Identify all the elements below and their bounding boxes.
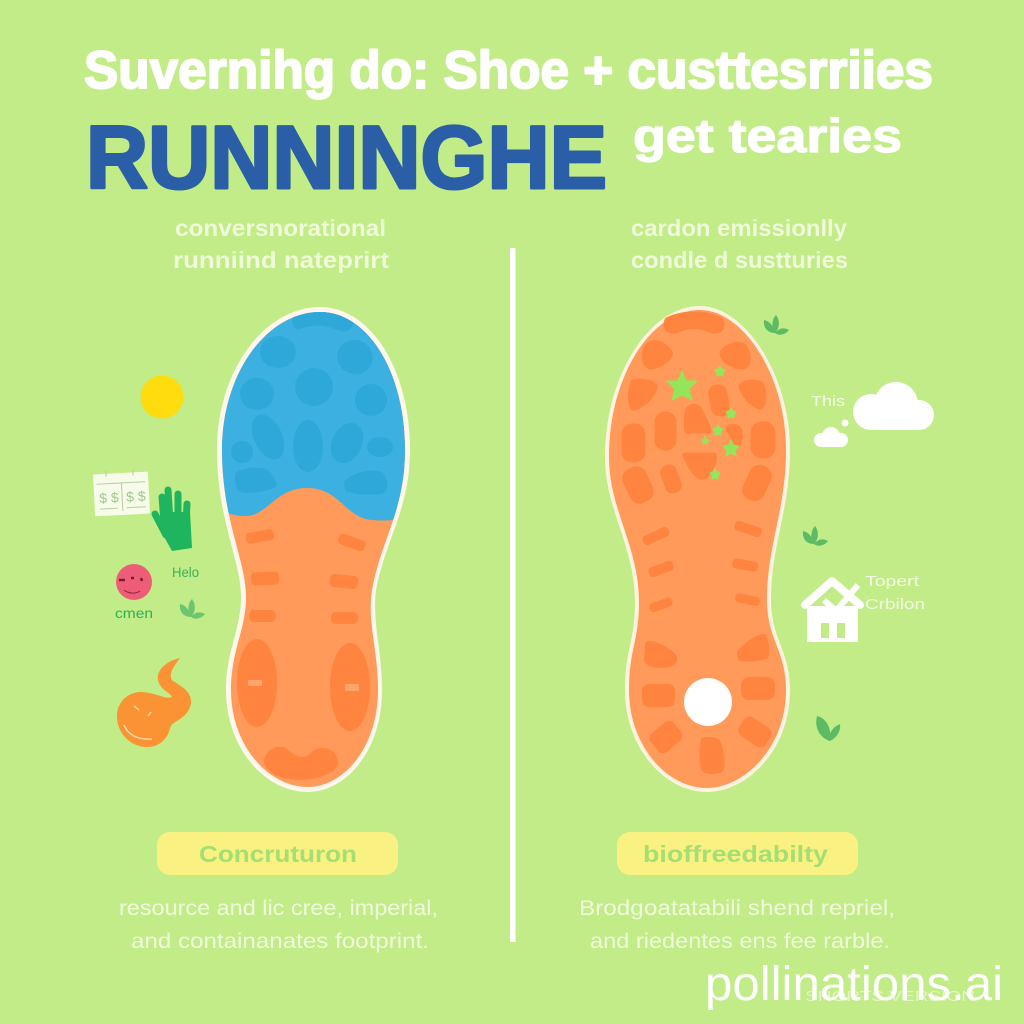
label: Helo: Helo	[172, 564, 199, 580]
label: This: This	[811, 393, 845, 410]
blue forefoot	[222, 312, 405, 520]
right description: Brodgoatatabili shend repriel,	[579, 897, 895, 920]
icon: big cloud	[853, 382, 934, 430]
icon: green hand	[155, 490, 192, 551]
right badge: bioffreedabilty: bioffreedabilty	[643, 841, 828, 867]
panel: right shoe sole	[605, 306, 790, 792]
right subtitle: cardon emissionlly	[631, 215, 847, 241]
label: cmen: cmen	[115, 605, 153, 621]
icon: calendar with dollars: $ $	[99, 489, 119, 506]
icon: leaf bottom	[816, 716, 840, 741]
sole fill and tread	[609, 310, 786, 788]
left badge: Concruturon: Concruturon	[199, 841, 357, 867]
icon: small plant	[180, 599, 205, 619]
icon: calendar with dollars	[93, 469, 150, 516]
icon: small cloud	[814, 420, 848, 447]
icon: yellow sun	[140, 376, 184, 418]
heading: RUNNINGHE: RUNNINGHE	[86, 107, 607, 207]
orange heel	[222, 312, 405, 787]
left subtitle: runniind nateprirt	[173, 247, 389, 273]
right description	[579, 897, 895, 953]
label: Topert Crbilon: Topert	[865, 573, 920, 590]
label: Topert Crbilon	[865, 573, 925, 613]
left subtitle: conversnorational	[175, 215, 386, 241]
left description: resource and lic cree, imperial,	[119, 897, 438, 920]
left subtitle	[173, 215, 389, 273]
icon: pink face	[116, 564, 152, 600]
white circle	[684, 678, 732, 726]
right badge: bioffreedabilty	[617, 832, 858, 875]
left description	[119, 897, 438, 953]
right subtitle: condle d sustturies	[631, 247, 848, 273]
watermark: pollinations.ai	[705, 958, 1003, 1011]
faint caption: SHORTS VERSION: SHORTS VERSION	[805, 988, 975, 1005]
left badge: Concruturon	[157, 832, 398, 875]
label: Topert Crbilon: Crbilon	[865, 596, 925, 613]
left description: and containanates footprint.	[131, 930, 429, 953]
heading: get tearies: get tearies	[633, 109, 902, 162]
icon: leaf top	[764, 315, 789, 335]
icon: leaf middle	[803, 526, 828, 546]
right subtitle	[631, 215, 848, 273]
panel: left shoe sole	[217, 307, 410, 792]
green stars	[667, 366, 739, 479]
right description: and riedentes ens fee rarble.	[590, 930, 890, 953]
title line: Suvernihg do: Shoe + custtesrriies	[84, 41, 933, 100]
icon: calendar with dollars: $ $	[126, 488, 146, 505]
center divider	[510, 248, 516, 942]
icon: orange gourd	[117, 658, 191, 747]
icon: house with check	[805, 581, 860, 642]
